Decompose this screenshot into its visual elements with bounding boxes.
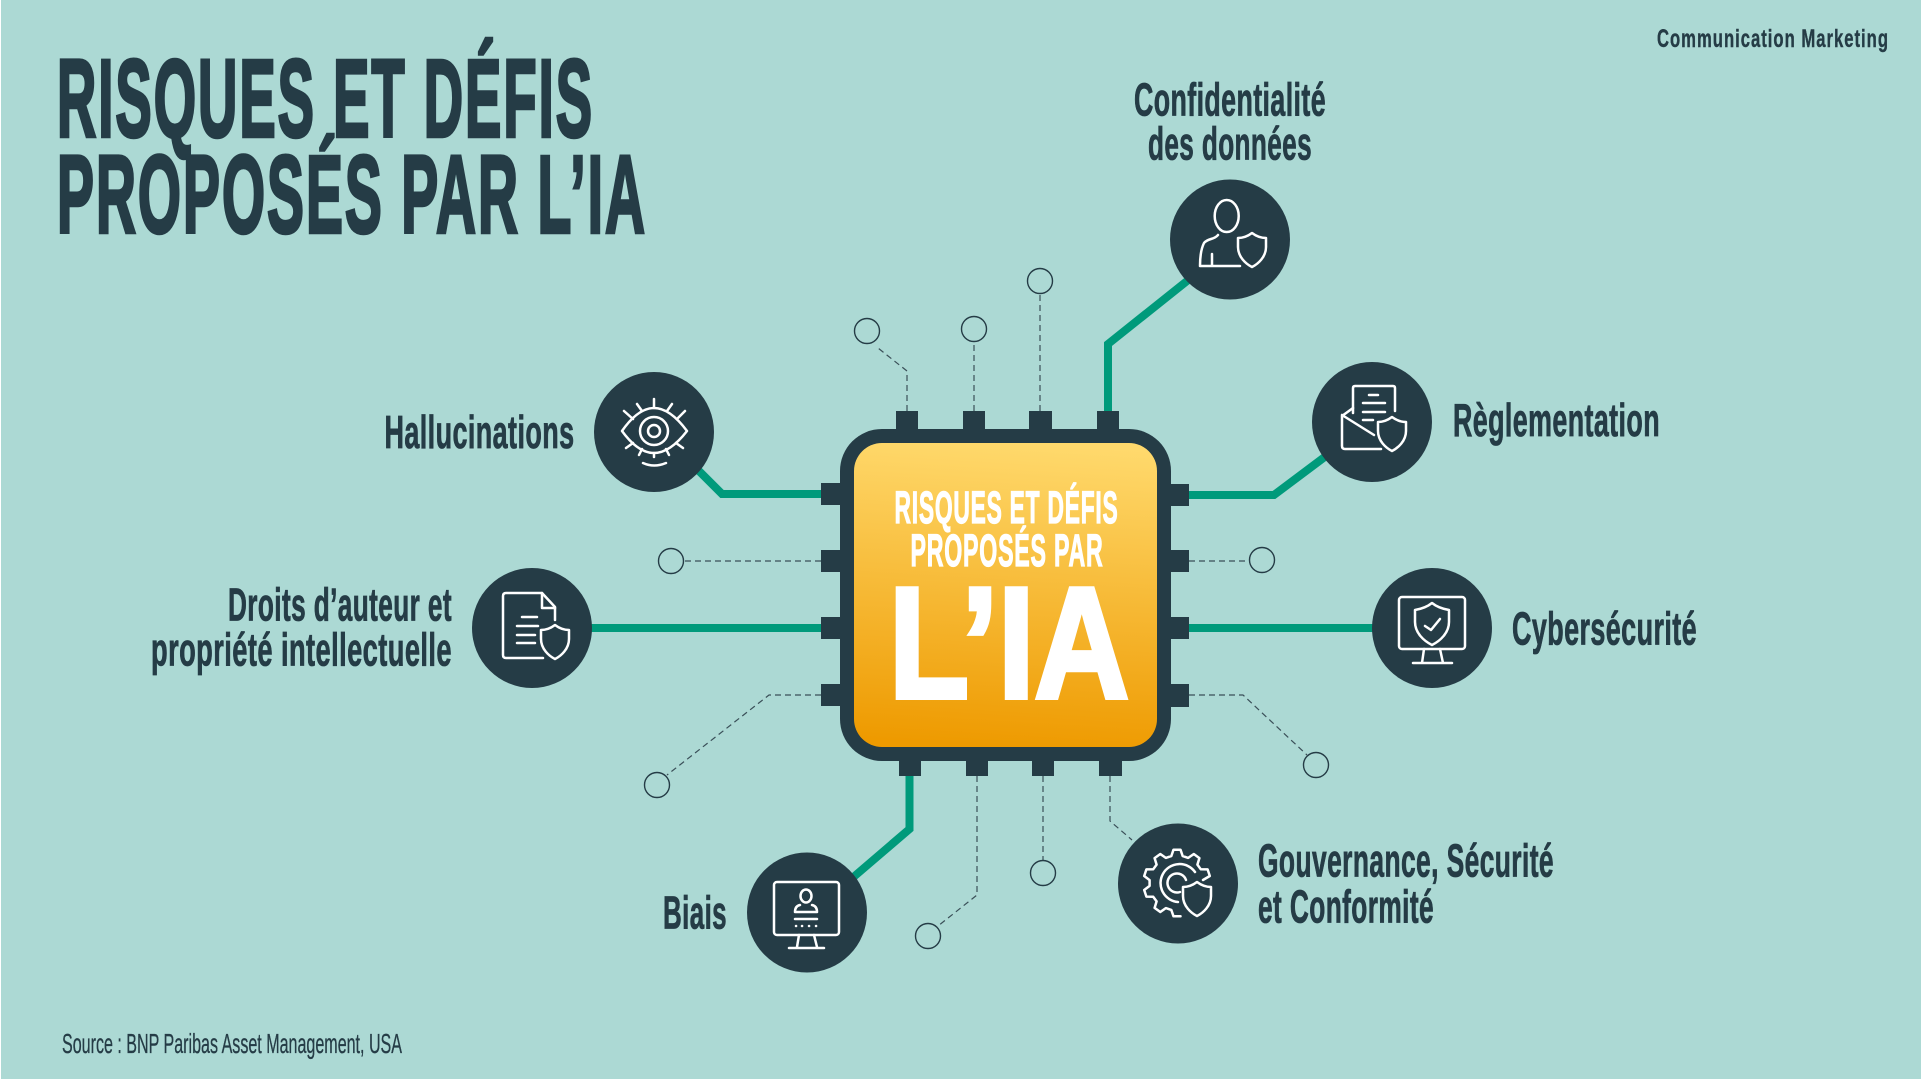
green connector: cybersécurité [1189,624,1380,632]
node: cybersécurité [1372,568,1697,688]
label: Règlementation [1453,394,1660,446]
green connector: droits d'auteur [585,624,821,632]
label: Gouvernance, Sécurité [1258,834,1554,886]
title: PROPOSÉS PAR L’IA [57,134,647,256]
label: et Conformité [1258,880,1434,932]
label [151,578,452,676]
badge [1372,568,1492,688]
green connector: règlementation [1189,453,1330,495]
icon: eye [622,399,687,466]
badge [747,852,867,972]
dashed connector: top middle left [962,316,986,411]
dashed connector: bottom middle [1030,776,1056,886]
icon: letter with shield [1342,386,1406,451]
icon: monitor with shield [1399,597,1465,663]
badge [1170,180,1290,300]
green connector: biais [850,776,910,880]
chip text: PROPOSÉS PAR [910,525,1104,576]
node: confidentialité [1134,74,1326,300]
node: droits d'auteur [151,568,592,688]
dashed connector: bottom left [916,776,977,948]
chip pins [821,411,1189,776]
dashed connector: left lower [644,695,821,798]
chip text: L’IA [889,556,1129,732]
dashed connector: right upper [1189,548,1274,572]
icon: monitor with profile [774,882,839,948]
label: Hallucinations [384,406,574,458]
source note: Source : BNP Paribas Asset Management, USA [62,1028,402,1059]
chip face [854,443,1157,747]
node: gouvernance [1118,824,1554,944]
label: Cybersécurité [1512,602,1697,654]
icon: gear with shield [1144,850,1211,916]
node: règlementation [1312,362,1660,482]
dashed connector: top left [854,318,907,411]
dashed connector: bottom right [1110,776,1132,840]
green connector: confidentialité [1108,277,1192,411]
node: biais [663,852,867,972]
icon: person with shield [1200,200,1266,267]
dashed connector: right lower [1189,695,1328,778]
dashed connector: top middle right [1028,268,1052,411]
chip text: RISQUES ET DÉFIS [894,482,1118,533]
title: RISQUES ET DÉFIS [57,38,594,160]
icon: document with shield [503,593,569,659]
badge [594,372,714,492]
label [1258,834,1554,932]
chip [821,411,1189,776]
node: hallucinations [384,372,714,492]
label: Biais [663,886,727,938]
badge [1312,362,1432,482]
green connector: hallucinations [692,464,821,494]
label: des données [1148,118,1312,170]
chip text [889,482,1129,732]
label: Confidentialité [1134,74,1326,126]
chip body [840,429,1171,761]
badge [472,568,592,688]
label [1134,74,1326,170]
label: Droits d’auteur et [228,578,452,630]
dashed connector: left upper [658,548,821,574]
label: propriété intellectuelle [151,624,452,676]
title [57,38,647,256]
badge [1118,824,1238,944]
